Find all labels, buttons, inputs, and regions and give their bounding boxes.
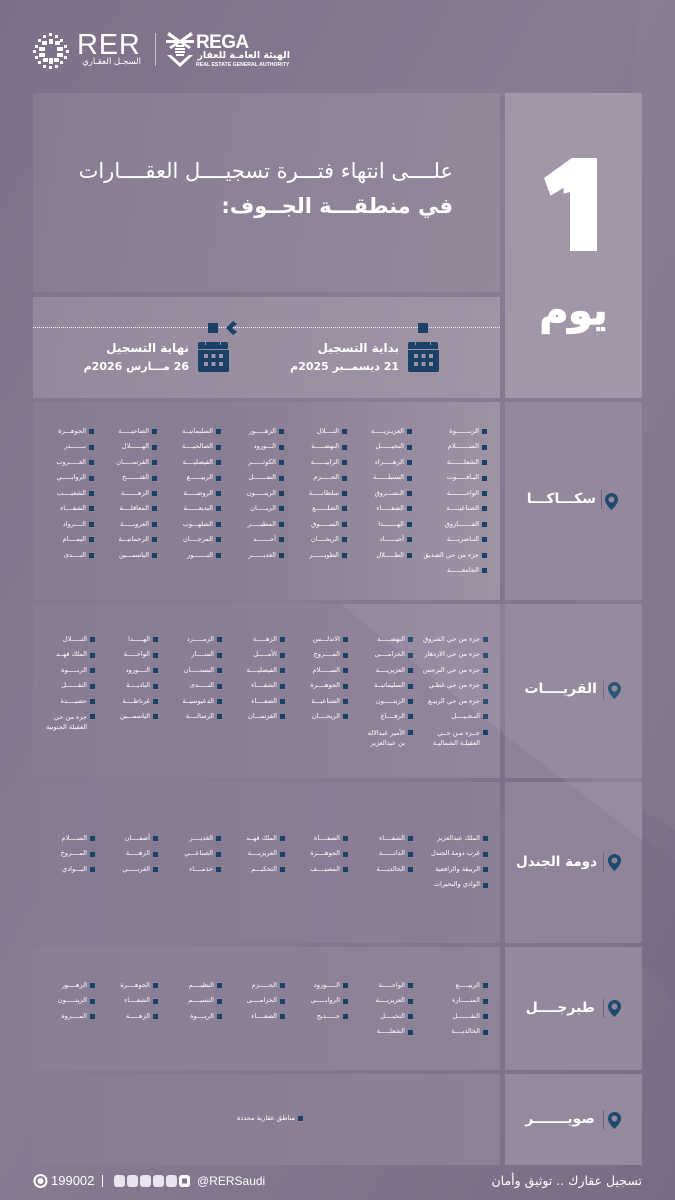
- column 6: الشفــــاء: [124, 996, 150, 1004]
- icon: REGA palm: [166, 32, 194, 67]
- column 4: المطيـــــر: [248, 520, 276, 528]
- separator: [102, 1175, 103, 1187]
- divider: [603, 853, 604, 872]
- big number: 1: [543, 126, 616, 273]
- column 2: الخالديــــة: [376, 865, 405, 873]
- column 3: سلطانـــــة: [309, 489, 339, 497]
- column 3: الـــــورود: [314, 981, 340, 989]
- column 4: الفرســـان: [248, 712, 277, 720]
- column 3: الجوهــــرة: [310, 849, 340, 857]
- column 5: النـــــــور: [187, 550, 213, 558]
- column 1: جزء من حي الصديق: [423, 550, 479, 558]
- column 2: الطـــــلال: [376, 550, 404, 558]
- column 5: الروضـــــة: [184, 489, 213, 497]
- column 6: الغربـــــي: [122, 865, 150, 873]
- city name: دومة الجندل: [516, 854, 597, 870]
- column 1: الوادي والبحيرات: [434, 880, 480, 888]
- column 1: الســـــــلام: [448, 442, 479, 450]
- column 5: خذمــــاء: [189, 865, 213, 873]
- column 2: النخيــــــل: [375, 442, 404, 450]
- column 5: الدعيوسيــة: [182, 697, 214, 705]
- column 2: النهضـــــة: [377, 635, 405, 643]
- start label: بداية التسجيل: [318, 341, 399, 355]
- panel: one day: [505, 93, 642, 398]
- column 1: الربـــــــوة: [449, 427, 479, 435]
- column 2: الأمير عبدالاله: [368, 729, 405, 737]
- column 2: الزهـــــراء: [375, 458, 404, 466]
- icon: pin: [608, 1000, 621, 1017]
- column 4: الصفــــاء: [251, 697, 277, 705]
- column 5: الغديــــر: [189, 834, 213, 842]
- column 3: التــــلال: [317, 427, 339, 435]
- REGA english name: REAL ESTATE GENERAL AUTHORITY: [196, 62, 289, 68]
- column 6: [122, 834, 158, 873]
- column 1: جزء من حي الربيـع: [428, 697, 480, 705]
- column 5: النسيــــم: [188, 996, 214, 1004]
- panel: dates: [33, 297, 500, 398]
- divider: [601, 490, 602, 509]
- column 6: المعاقلــــة: [120, 504, 149, 512]
- panel: Qurayyat city: [505, 604, 642, 778]
- column 4: التحكيـــم: [251, 865, 277, 873]
- column 7: اليمــــام: [63, 535, 86, 543]
- column 1: الربيـــــع: [456, 981, 480, 989]
- column 5: الصناعـــي: [184, 849, 213, 857]
- column 6: الرحمانيـــة: [118, 535, 149, 543]
- column 7: الغـــــروب: [56, 458, 86, 466]
- marker start: [418, 323, 428, 333]
- logos header: [33, 29, 290, 69]
- column 2: الخزامــــى: [375, 650, 405, 658]
- column 4: النفـــــــل: [248, 473, 276, 481]
- column 6: الهـــــدا: [128, 635, 150, 643]
- column 3: النهضـــــة: [311, 442, 339, 450]
- panel: Sakaka city: [505, 402, 642, 600]
- panel: title: [33, 93, 500, 292]
- column 3: المصيــــف: [310, 865, 340, 873]
- column 1: [431, 834, 488, 888]
- column 2: [368, 635, 413, 747]
- column 3: الســـــوق: [311, 520, 339, 528]
- column 5: الربيــــــع: [187, 473, 213, 481]
- column 7: الزيتـــــون: [58, 996, 87, 1004]
- column 6: الباديــــة: [126, 681, 150, 689]
- column 5: الفيصليــــة: [183, 458, 213, 466]
- column 4: الحـــــزم: [252, 981, 277, 989]
- column 3: الجوهــــرة: [310, 681, 340, 689]
- column 1: جزء من حي الازدهار: [424, 650, 480, 658]
- column 1: جــزء مـن حــي: [437, 729, 480, 737]
- column 2: الرفــــاع: [381, 712, 405, 720]
- REGA wordmark: REGA: [196, 32, 248, 53]
- panel: Sakaka list: [33, 402, 500, 600]
- column 1: النـخـيــــل: [451, 712, 480, 720]
- column 4: الريـــــان: [250, 504, 276, 512]
- column 1: العقيلـة الشماليـة: [433, 739, 480, 747]
- column 5: البديعــــــة: [184, 504, 213, 512]
- column 2: [371, 427, 412, 558]
- column 5: الصالحيــــة: [182, 442, 213, 450]
- column 5: [184, 834, 221, 873]
- column 5: المنــــار: [191, 650, 214, 658]
- column 2: النخيــــل: [380, 1012, 405, 1020]
- column 1: النـاصريــــة: [447, 535, 479, 543]
- icon: pin: [608, 854, 621, 871]
- column 7: الســــلام: [62, 834, 87, 842]
- city name: سكـــاكـــا: [527, 491, 596, 507]
- icon: calendar end: [198, 342, 229, 372]
- column 6: الزهـــــة: [126, 849, 150, 857]
- column 4: الـــورود: [254, 442, 276, 450]
- divider: [603, 999, 604, 1018]
- divider: [603, 681, 604, 700]
- column 4: الغديــــــر: [248, 550, 276, 558]
- column 1: [451, 981, 488, 1035]
- column 6: [116, 427, 157, 559]
- column 7: [61, 834, 95, 873]
- column 2: الصفـــــاء: [376, 504, 404, 512]
- end label: نهاية التسجيل: [106, 341, 189, 355]
- day label: يوم: [540, 289, 607, 334]
- column 3: الروابـــــي: [310, 996, 340, 1004]
- column 7: المــــروة: [61, 1012, 87, 1020]
- column 2: [376, 981, 413, 1035]
- column 2: الزيتـــــون: [376, 697, 405, 705]
- column 1: جزء من حي النرجس: [423, 666, 480, 674]
- column 6: الضاحيـــــة: [118, 427, 149, 435]
- column 5: السليمانيــة: [182, 427, 213, 435]
- column 4: أحـــــــد: [253, 535, 276, 543]
- column 6: الفرســـــان: [116, 458, 149, 466]
- column 6: الياسمـــين: [120, 712, 150, 720]
- city name: صويـــــــر: [525, 1111, 595, 1127]
- column 6: الزهـــــــة: [121, 489, 149, 497]
- column 3: الاندلـــس: [313, 635, 340, 643]
- column 6: [120, 635, 158, 720]
- column 5: [182, 427, 221, 559]
- column 4: الزهـــــور: [249, 427, 276, 435]
- panel: Suwayr list: [33, 1074, 500, 1165]
- icon: pin: [605, 493, 618, 510]
- social handle: @RERSaudi: [197, 1174, 265, 1188]
- column 1: غرب دومة الجندل: [431, 849, 480, 857]
- column 7: المــــروج: [61, 849, 87, 857]
- column 6: الهــــــلال: [122, 442, 149, 450]
- column 5: الشلهـــوب: [183, 520, 213, 528]
- RER arabic name: السجـل العقـاري: [82, 57, 141, 67]
- column 6: الزهـــــة: [126, 1012, 150, 1020]
- column 4: الخزامــــى: [247, 996, 277, 1004]
- panel: Dumat Al-Jandal city: [505, 782, 642, 943]
- column 5: الربــــوة: [190, 1012, 214, 1020]
- column 4: الزهـــــة: [253, 635, 277, 643]
- column 6: الــــورود: [126, 666, 150, 674]
- column 3: المــــروج: [314, 650, 340, 658]
- column 1: المنـــــارة: [452, 996, 480, 1004]
- column 4: [247, 427, 284, 559]
- column 1: الخالديــــة: [451, 1027, 480, 1035]
- column 3: الحـــــزم: [314, 473, 339, 481]
- column 7: العقيلة الجنوبية: [46, 723, 87, 731]
- column 7: الملك فهــد: [56, 650, 87, 658]
- column 6: غرناطــــة: [123, 697, 150, 705]
- column 2: العزيـزيـــــة: [371, 427, 404, 435]
- column 2: الواحـــــة: [379, 981, 405, 989]
- column 3: [308, 427, 347, 559]
- column 5: [182, 635, 222, 720]
- column 3: الرابيــــــة: [311, 458, 339, 466]
- column 6: العروبـــــة: [120, 520, 149, 528]
- panel: Tabarjal city: [505, 947, 642, 1070]
- column 7: بـــــــدر: [64, 442, 86, 450]
- end date: 26 مـــارس 2026م: [84, 360, 189, 373]
- divider: [155, 33, 156, 66]
- column 4: [247, 981, 285, 1020]
- column 4: العزيزيــــة: [248, 849, 277, 857]
- column 7: التـــــلال: [63, 635, 87, 643]
- column 3: [310, 981, 348, 1020]
- column 7: النفــــــل: [61, 681, 87, 689]
- column 1: [423, 427, 487, 574]
- column 2: العزيزيــــة: [376, 666, 405, 674]
- column 4: الزيتـــــون: [247, 489, 276, 497]
- column 5: [188, 981, 222, 1020]
- phone number: 199002: [51, 1173, 94, 1188]
- divider: [603, 1110, 604, 1129]
- arrow: [226, 321, 237, 335]
- column 7: [46, 635, 95, 731]
- column 2: العزيزيــــة: [376, 996, 405, 1004]
- icons: social: [114, 1175, 194, 1187]
- column 4: الفيصليــــة: [247, 666, 277, 674]
- column 3: الطويــــــر: [309, 550, 339, 558]
- column 7: النــــدى: [64, 550, 86, 558]
- panel: Suwayr city: [505, 1074, 642, 1165]
- icon: pin: [608, 1112, 621, 1129]
- column 6: الفتـــــــح: [122, 473, 149, 481]
- REGA arabic name: الهيئة العامـة للعقار: [197, 50, 290, 61]
- column 2: السليمانيــة: [374, 681, 405, 689]
- column 7: [58, 981, 95, 1020]
- column 7: حصيــــدة: [61, 697, 87, 705]
- column 1: الجامعــــــة: [447, 566, 479, 574]
- column 2: أجيــــــاد: [380, 535, 404, 543]
- column 3: [310, 834, 348, 873]
- column 1: مناطق عقارية محددة: [237, 1114, 295, 1122]
- column 1: الملك عبدالعزيز: [437, 834, 480, 842]
- column 2: الشعلـــــة: [377, 1027, 405, 1035]
- column 6: الواحـــــة: [124, 650, 150, 658]
- icon: pin: [608, 682, 621, 699]
- column 1: الواحــــــــة: [447, 489, 479, 497]
- column 1: النفـــــــل: [452, 1012, 480, 1020]
- column 7: الجوهـــرة: [58, 427, 86, 435]
- column 3: الصفــــاة: [314, 834, 340, 842]
- column 1: جزء من حي الشروق: [423, 635, 480, 643]
- column 1: الربيقة والرافعية: [435, 865, 480, 873]
- column 4: [246, 834, 285, 873]
- column 5: النظيــــم: [189, 981, 214, 989]
- column 5: البستـــــان: [184, 666, 214, 674]
- column 2: السنبلــــــة: [373, 473, 404, 481]
- column 3: الســـــلام: [313, 666, 340, 674]
- column 4: الصفــــاء: [251, 1012, 277, 1020]
- heading line 1: علــــى انتهاء فتـــرة تسجيــــل العقــــارات: [79, 159, 453, 183]
- column 3: الضلــــــع: [312, 504, 339, 512]
- column 7: الشفــــاء: [60, 504, 86, 512]
- column 7: الــــرواد: [63, 520, 86, 528]
- column 6: الجوهــــرة: [120, 981, 150, 989]
- footer: [33, 1170, 642, 1194]
- column 2: بن عبدالعزيز: [371, 739, 405, 747]
- column 3: الصناعيـــة: [311, 697, 340, 705]
- slogan: تسجيل عقارك .. توثيق وأمان: [491, 1173, 642, 1188]
- icon: RER dotted logo: [33, 33, 69, 69]
- dotted timeline: [33, 327, 500, 328]
- RER wordmark: RER: [77, 29, 141, 61]
- column 4: الكوثــــــر: [248, 458, 276, 466]
- column 7: الزهــــور: [62, 981, 87, 989]
- column 7: الشعيــــب: [57, 489, 86, 497]
- column 1: اليـاقـــــوت: [447, 473, 479, 481]
- column 7: الربـــــوة: [61, 666, 87, 674]
- column 5: المرجــــان: [183, 535, 213, 543]
- column 4: الملك فهــد: [246, 834, 277, 842]
- city name: القريــــات: [524, 681, 597, 697]
- column 1: الصناعيـــــة: [446, 504, 479, 512]
- column 6: [120, 981, 158, 1020]
- column 5: الرسالــــة: [186, 712, 214, 720]
- column 2: الدانــــــة: [379, 849, 405, 857]
- column 3: [310, 635, 348, 720]
- heading line 2: في منطقـــة الجــوف:: [221, 194, 453, 218]
- icon: calendar start: [408, 342, 439, 372]
- city name: طبرجــــل: [526, 1000, 595, 1016]
- icon: headset: [33, 1174, 48, 1188]
- column 1: الشعلـــــــة: [447, 458, 479, 466]
- panel: Qurayyat list: [33, 604, 500, 778]
- column 1: الفـــــــاروق: [445, 520, 479, 528]
- panel: Tabarjal list: [33, 947, 500, 1070]
- column 1: [423, 635, 488, 747]
- column 5: الزمـــــرد: [187, 635, 214, 643]
- column 2: الـشـــروق: [375, 489, 404, 497]
- column 2: [376, 834, 413, 873]
- column 7: جزء من حي: [54, 713, 87, 721]
- column 7: البـــوادي: [62, 865, 87, 873]
- column 6: أصفــــان: [125, 834, 150, 842]
- column 3: الريحــــان: [312, 712, 340, 720]
- start date: 21 ديسمــبر 2025م: [290, 360, 399, 373]
- column 3: حـــــديج: [317, 1012, 340, 1020]
- column 4: [247, 635, 285, 720]
- column 2: الشفــــاء: [379, 834, 405, 842]
- column 4: الأمـــــل: [253, 650, 277, 658]
- column 7: الروابـــــي: [56, 473, 86, 481]
- panel: Dumat Al-Jandal list: [33, 782, 500, 943]
- column 3: الريحــــان: [311, 535, 339, 543]
- column 5: النـــــدى: [190, 681, 214, 689]
- column 6: الياسمـــين: [119, 550, 149, 558]
- column 2: الهـــــــدا: [378, 520, 404, 528]
- column 7: [56, 427, 94, 558]
- column 4: الشفــــاء: [251, 681, 277, 689]
- marker end: [208, 323, 218, 333]
- column 1: جزء من حي غطـي: [428, 681, 480, 689]
